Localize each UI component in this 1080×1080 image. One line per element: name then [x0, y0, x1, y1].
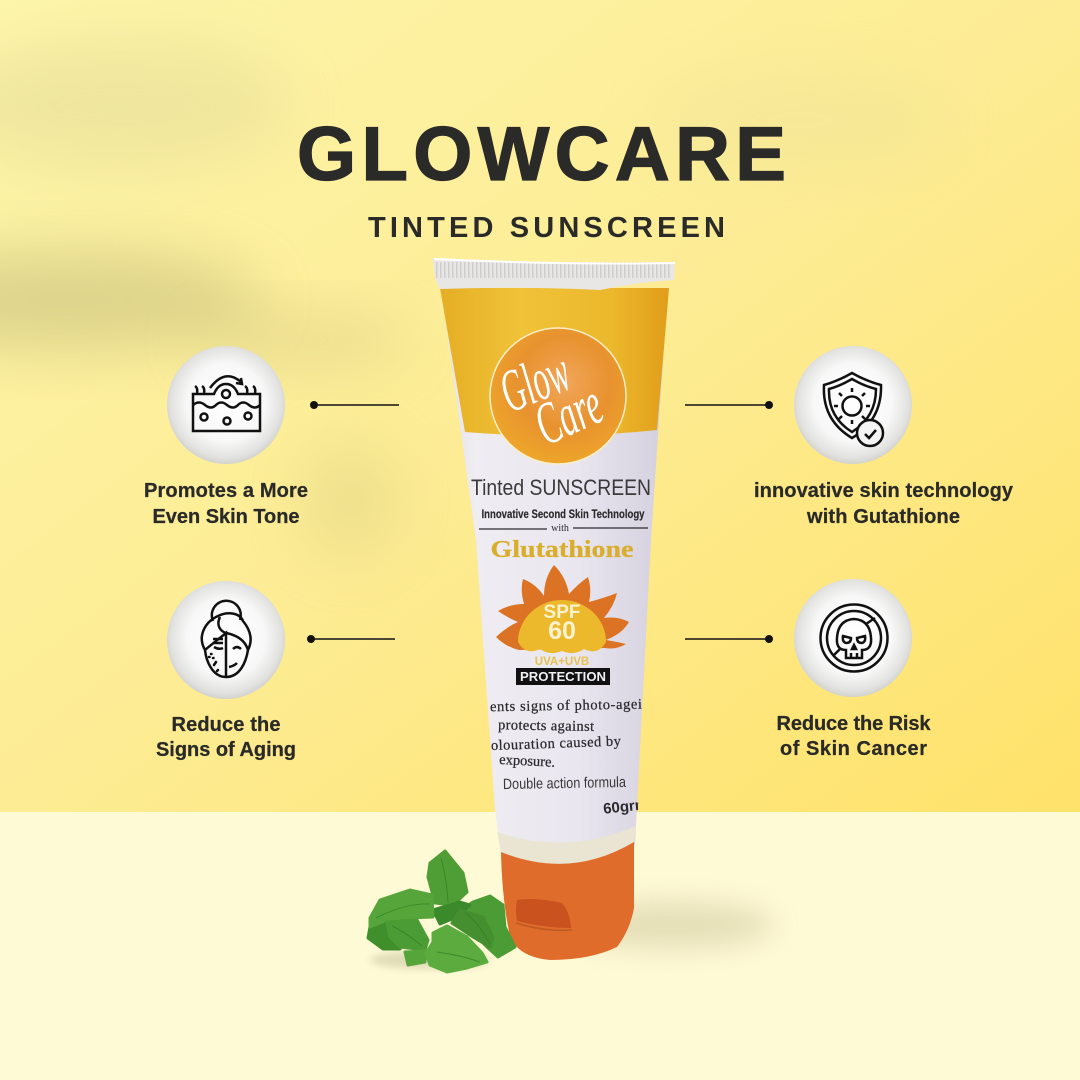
product tube — [433, 258, 675, 960]
logo circle — [490, 328, 626, 464]
orb — [794, 579, 912, 697]
feature: signs of aging: Signs of Aging — [156, 739, 296, 761]
tube description text: Double action formula — [503, 774, 627, 793]
feature: even skin tone: Even Skin Tone — [152, 506, 300, 528]
crimped seal — [433, 258, 675, 290]
orb — [167, 581, 285, 699]
pale collar band — [497, 826, 636, 864]
label: Reduce the — [172, 714, 280, 736]
feature: skin technology: with Gutathione — [806, 506, 960, 528]
title: GLOWCARE — [297, 112, 786, 197]
connector — [307, 635, 395, 643]
basil leaves — [368, 851, 515, 972]
feature: skin cancer: of Skin Cancer — [780, 738, 927, 760]
orb — [167, 346, 285, 464]
tube shadow on floor — [565, 901, 775, 949]
feature: skin technology — [685, 346, 1014, 528]
connector — [685, 635, 773, 643]
icon: face half aged — [202, 601, 251, 677]
icon: crossed-out skull — [820, 604, 888, 672]
feature: even skin tone — [144, 346, 399, 528]
feature: signs of aging — [156, 581, 395, 761]
logo circle: Glow — [490, 338, 579, 426]
connector — [685, 401, 773, 409]
tube label text: Tinted SUNSCREEN — [471, 475, 651, 500]
label: Promotes a More — [144, 480, 308, 502]
floor — [0, 812, 1080, 1080]
label: innovative skin technology — [754, 480, 1014, 502]
tube label text: Innovative Second Skin Technology — [482, 507, 645, 521]
label: Reduce the Risk — [776, 713, 931, 735]
background wall — [0, 0, 1080, 812]
tube label text — [471, 479, 650, 558]
SPF sun badge: 60 — [548, 617, 576, 645]
SPF sun badge: SPF — [544, 602, 580, 623]
feature: skin cancer — [685, 579, 931, 760]
gold upper panel — [440, 288, 669, 436]
tube description text: protects against — [498, 717, 594, 735]
icon: sun shield with check — [824, 373, 883, 446]
tube description text: ents signs of photo-agei — [490, 697, 642, 715]
tube description text — [490, 697, 649, 818]
tube description text: exposure. — [499, 752, 556, 771]
logo circle: Care — [524, 371, 612, 458]
tube label text: with — [551, 523, 569, 534]
subtitle: TINTED SUNSCREEN — [368, 212, 725, 244]
connector — [310, 401, 399, 409]
SPF sun badge: UVA+UVB — [535, 656, 589, 668]
tube description text: 60grm — [602, 796, 649, 818]
tube description text: olouration caused by — [491, 734, 622, 754]
orange cap — [501, 842, 634, 960]
orb — [794, 346, 912, 464]
SPF sun badge: PROTECTION — [520, 670, 606, 684]
tube label text: Glutathione — [490, 537, 634, 563]
tube body — [441, 288, 668, 855]
SPF sun badge — [496, 565, 629, 685]
icon: skin layers with arrow — [193, 376, 260, 431]
